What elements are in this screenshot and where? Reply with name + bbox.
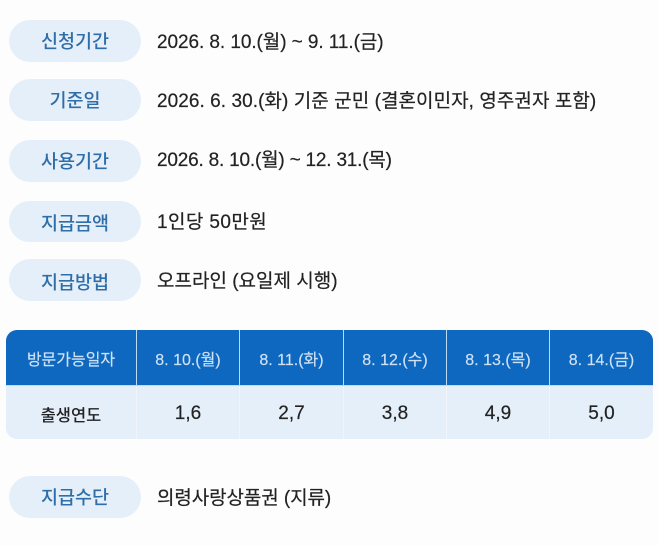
header: 8.11: 8. 11.(화) xyxy=(259,352,324,368)
value: 4,9: 4,9 xyxy=(485,402,511,424)
header: 8.13 xyxy=(447,330,549,385)
text: payment method: 오프라인 (요일제 시행) xyxy=(157,271,338,292)
header: 8.13: 8. 13.(목) xyxy=(465,352,531,368)
header: 8.11 xyxy=(240,330,343,385)
header: 8.12 xyxy=(344,330,446,385)
text: payment means: 의령사랑상품권 (지류) xyxy=(157,488,331,509)
header: visit date xyxy=(6,330,136,385)
label: reference date xyxy=(9,79,141,121)
header: 8.10 xyxy=(137,330,239,385)
label: application period: 신청기간 xyxy=(41,31,109,52)
header: 8.12: 8. 12.(수) xyxy=(362,352,428,368)
label: payment method xyxy=(9,259,141,301)
table: visit dates by birth year xyxy=(6,330,653,439)
value: 3,8 xyxy=(344,386,446,441)
label: payment means: 지급수단 xyxy=(41,487,109,508)
value: 2,7 xyxy=(240,386,343,441)
text: reference date: 2026. 6. 30.(화) 기준 군민 (결혼이민자, 영주권자 포함) xyxy=(157,91,596,112)
value: 3,8: 3,8 xyxy=(382,402,408,424)
row label: birth year xyxy=(6,386,136,441)
header: visit date: 방문가능일자 xyxy=(27,352,115,368)
value: 2,7: 2,7 xyxy=(278,402,305,424)
label: application period xyxy=(9,20,141,62)
text: usage period: 2026. 8. 10.(월) ~ 12. 31.(목) xyxy=(157,150,392,171)
value: 4,9 xyxy=(447,386,549,441)
value: 1,6 xyxy=(137,386,239,441)
row label: birth year: 출생연도 xyxy=(41,406,101,424)
label: reference date: 기준일 xyxy=(49,90,101,111)
label: usage period xyxy=(9,140,141,182)
label: payment amount: 지급금액 xyxy=(41,213,109,234)
value: 5,0: 5,0 xyxy=(588,402,615,424)
value: 1,6: 1,6 xyxy=(175,402,201,424)
label: payment method: 지급방법 xyxy=(41,272,109,293)
label: usage period: 사용기간 xyxy=(41,151,109,172)
label: payment means xyxy=(9,476,141,518)
text: application period: 2026. 8. 10.(월) ~ 9. 11.(금) xyxy=(157,32,384,53)
header: 8.14: 8. 14.(금) xyxy=(569,352,634,368)
header: 8.10: 8. 10.(월) xyxy=(155,352,221,368)
label: payment amount xyxy=(9,201,141,242)
value: 5,0 xyxy=(550,386,653,441)
text: payment amount: 1인당 50만원 xyxy=(157,212,267,233)
header: 8.14 xyxy=(550,330,653,385)
